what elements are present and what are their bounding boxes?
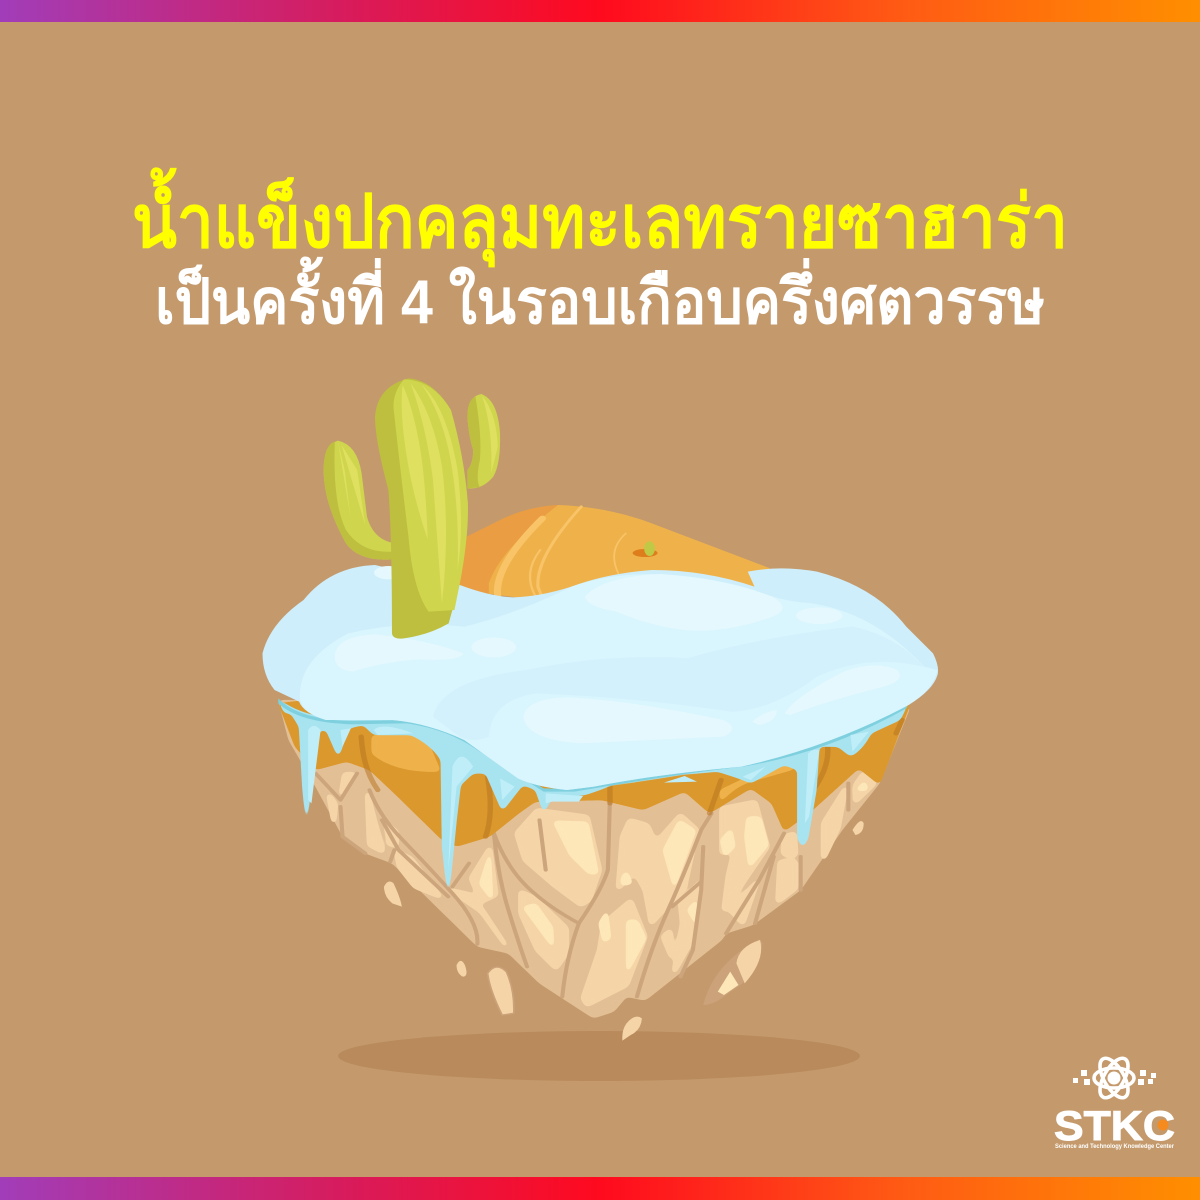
top gradient bar (0, 0, 1200, 22)
logo orange dot (1158, 1120, 1168, 1130)
falling rock fragments (384, 821, 864, 1041)
dune streaks (497, 507, 626, 597)
logo (1054, 1054, 1175, 1150)
ice inner surface (300, 574, 938, 790)
tiny distant cactus (633, 541, 658, 557)
cactus left and right arms (324, 394, 500, 560)
logo tagline: Science and Technology Knowledge Center (1055, 1143, 1174, 1150)
illustration: upper part, scale from crop (263, 378, 938, 790)
rock light facets (329, 773, 874, 1005)
ice mid tone band (433, 627, 923, 740)
bottom gradient bar (0, 1177, 1200, 1200)
logo atom emblem (1094, 1054, 1134, 1102)
illustration: floating rock lower part (276, 690, 911, 1041)
rock body (278, 700, 911, 1018)
sand dune (460, 505, 770, 603)
ice highlights (335, 566, 900, 743)
dripping icicles (276, 697, 908, 903)
title (132, 167, 1068, 337)
ice sheet (263, 565, 938, 790)
rock cracks (316, 773, 848, 997)
ground shadow (338, 1031, 860, 1081)
logo pixel squares (1073, 1070, 1156, 1085)
title line 1: น้ำแข็งปกคลุมทะเลทรายซาฮาร่า (132, 167, 1068, 268)
title line 2: เป็นครั้งที่ 4 ในรอบเกือบครึ่งศตวรรษ (155, 256, 1045, 337)
rock lightest facets (480, 782, 867, 972)
earth highlights (372, 733, 441, 772)
logo wordmark: STKC (1054, 1102, 1175, 1149)
main cactus (375, 378, 468, 639)
earth layer (278, 690, 911, 847)
earth shadow cracks (361, 720, 902, 837)
